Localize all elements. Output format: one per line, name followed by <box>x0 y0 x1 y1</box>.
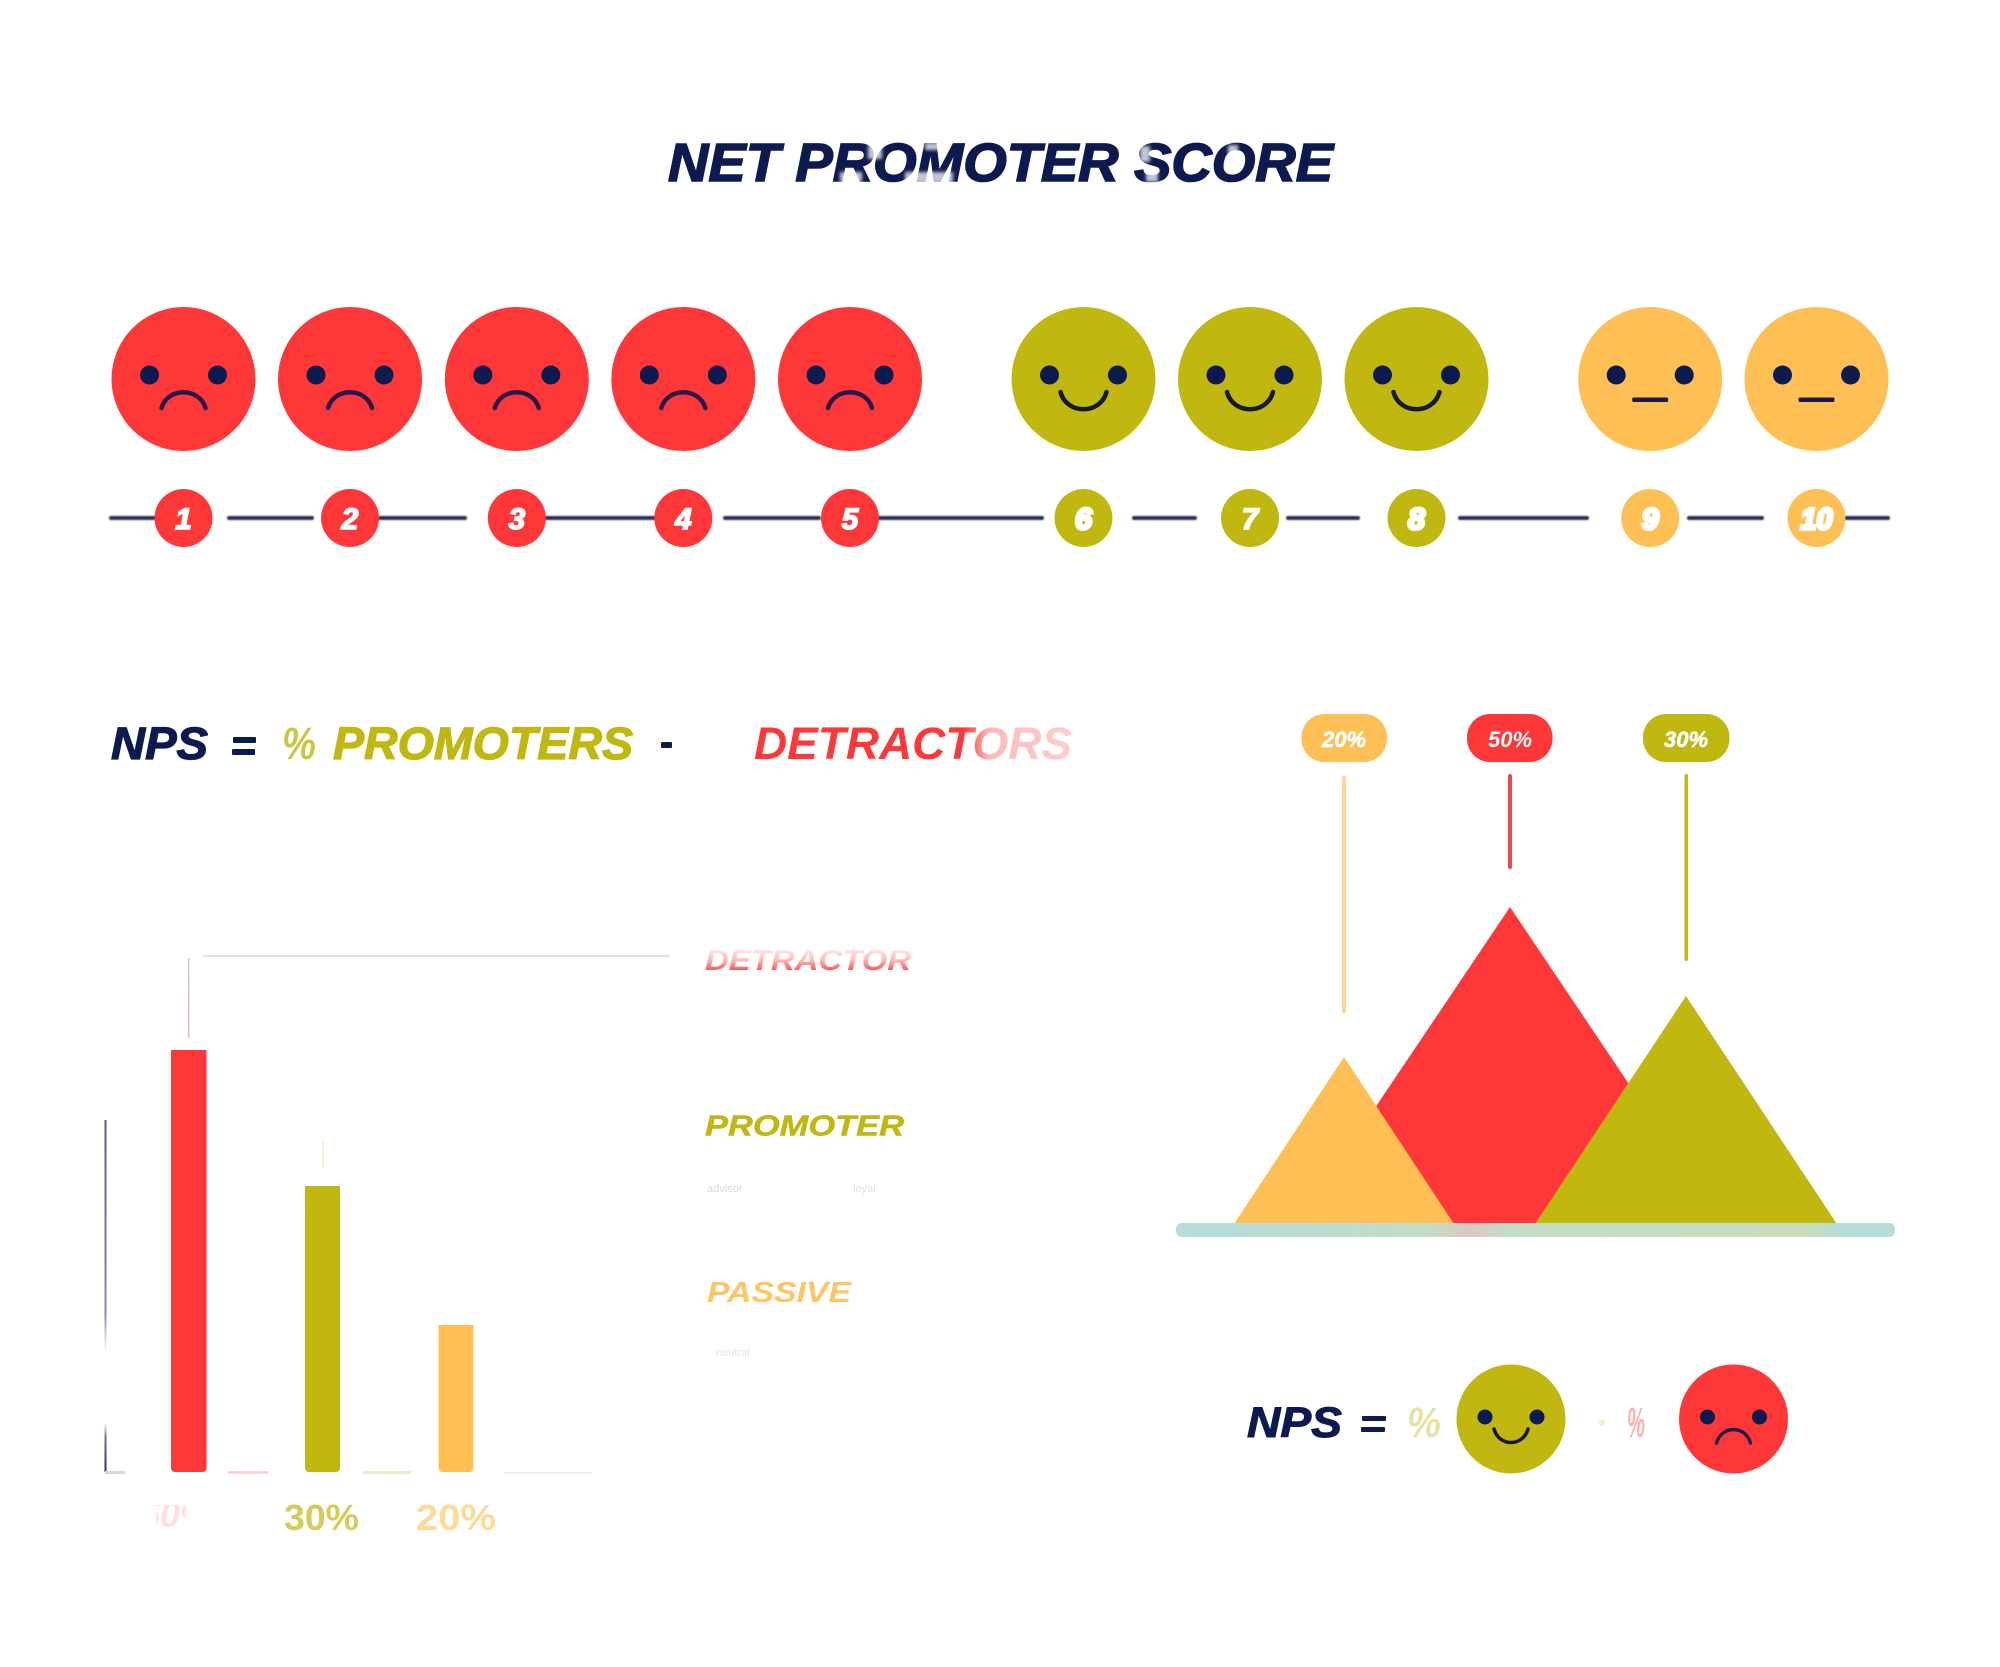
pill: 50% <box>1467 714 1552 762</box>
number 9: 9 <box>1642 503 1659 536</box>
number 10 <box>1788 489 1846 547</box>
triangle: passives <box>1234 1057 1454 1224</box>
title: NET PROMOTER SCORE <box>668 133 1335 193</box>
label NPS: NPS <box>1247 1399 1342 1447</box>
chart baseline <box>1176 1223 1895 1237</box>
percent sign, promoters: % <box>1407 1399 1441 1447</box>
face 2: detractor <box>278 307 422 451</box>
number 4 <box>654 489 712 547</box>
connector: promoters <box>1684 774 1688 961</box>
bar value: 30%: 30% <box>284 1497 359 1538</box>
face 4: detractor <box>611 307 755 451</box>
detractors term: DETRACTORS <box>754 718 1072 769</box>
number 2: 2 <box>341 503 359 536</box>
bar value: 20%: 20% <box>416 1497 496 1538</box>
percent sign: % <box>282 718 316 769</box>
face: promoter <box>1456 1364 1566 1474</box>
formula with emoji faces: % <box>1627 1399 1645 1447</box>
legend: promoter note end: loyal <box>853 1183 876 1195</box>
pill: 20%: 20% <box>1321 727 1366 752</box>
number 2 <box>321 489 379 547</box>
number 7 <box>1221 489 1279 547</box>
pill: 30%: 30% <box>1664 727 1708 752</box>
bar: promoters <box>305 1186 340 1472</box>
face 6: promoter <box>1012 307 1156 451</box>
equals sign <box>232 737 256 755</box>
panel: bar chart <box>104 955 670 1538</box>
connector: detractors <box>1508 774 1512 869</box>
number 6: 6 <box>1075 503 1092 536</box>
equals sign <box>1361 1416 1386 1432</box>
pill: 20% <box>1302 714 1387 762</box>
legend: detractor: DETRACTOR <box>705 945 911 977</box>
bar: detractors <box>171 1050 206 1472</box>
triangle: detractors <box>1297 907 1723 1224</box>
number 5: 5 <box>842 503 860 536</box>
panel: chart legend <box>705 945 911 1359</box>
number 5 <box>821 489 879 547</box>
legend: passive: PASSIVE <box>707 1277 853 1309</box>
formula label NPS: NPS <box>111 718 208 769</box>
leader line above promoter bar <box>322 1142 324 1169</box>
number 7: 7 <box>1242 503 1260 536</box>
face 7: promoter <box>1178 307 1322 451</box>
minus sign <box>661 742 672 748</box>
face: detractor <box>1679 1364 1788 1474</box>
legend: promoter note: advisor <box>707 1183 743 1195</box>
legend: promoter: PROMOTER <box>705 1110 904 1142</box>
pill: 30% <box>1643 714 1730 762</box>
face 9: passive <box>1578 307 1722 451</box>
panel: mountain chart <box>1176 714 1895 1237</box>
panel: emoji rating scale <box>112 307 1888 451</box>
number 8 <box>1388 489 1446 547</box>
triangle: promoters <box>1535 996 1837 1224</box>
connector: passives <box>1342 776 1346 1013</box>
leader line to detractor label <box>188 955 670 1038</box>
face 5: detractor <box>778 307 922 451</box>
pill: 50%: 50% <box>1488 727 1532 752</box>
number 10: 10 <box>1800 503 1833 536</box>
bar value: 50%: 50% <box>140 1494 212 1535</box>
number 9 <box>1621 489 1679 547</box>
promoters term: PROMOTERS <box>333 718 633 769</box>
number 3 <box>488 489 546 547</box>
bar: passives <box>438 1325 474 1472</box>
minus sign remnant <box>1599 1420 1605 1426</box>
face 1: detractor <box>112 307 256 451</box>
scale line segments <box>111 516 1888 520</box>
panel: number scale line <box>111 489 1888 547</box>
number 4: 4 <box>674 503 692 536</box>
number 3: 3 <box>508 503 525 536</box>
formula: NPS equals promoters minus detractors <box>111 718 1072 769</box>
chart axis <box>104 1120 593 1474</box>
number 6 <box>1054 489 1112 547</box>
face 10: passive <box>1744 307 1888 451</box>
number 8: 8 <box>1408 503 1425 536</box>
formula with emoji faces <box>1247 1364 1788 1474</box>
legend: passive note: neutral <box>716 1347 750 1359</box>
number 1: 1 <box>175 503 192 536</box>
face 3: detractor <box>445 307 589 451</box>
number 1 <box>154 489 212 547</box>
face 8: promoter <box>1344 307 1488 451</box>
